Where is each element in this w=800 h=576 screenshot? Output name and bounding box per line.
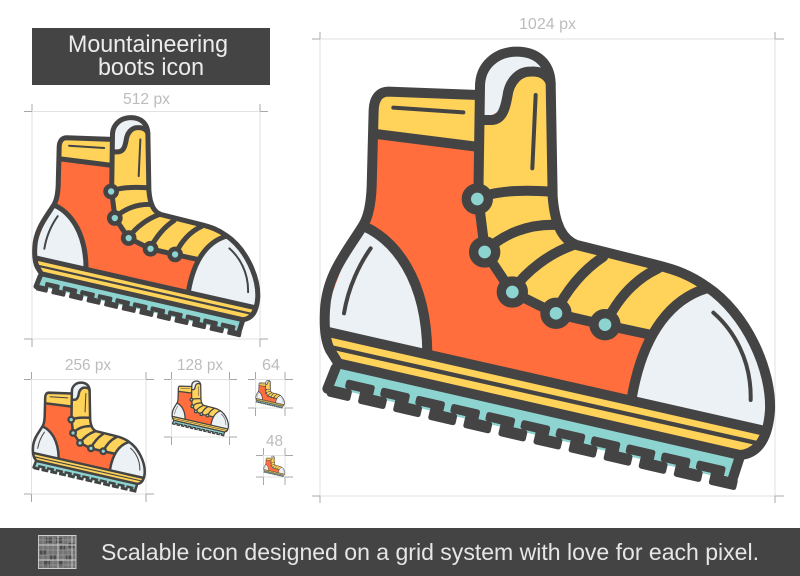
size guide: 512 px: 512 px [123,91,170,108]
icon: boot 512 px [35,118,258,336]
title [32,28,270,85]
footer caption: Scalable icon designed on a grid system with love for each pixel. [101,539,759,565]
boot silhouette [325,52,770,455]
size guide: 48 px [256,433,293,485]
highlights [344,95,751,400]
icon: boot 48 px [264,456,285,477]
icon: boot 1024 px [325,52,770,487]
eyelets [466,188,616,336]
tongue lining [480,52,551,122]
size guide: 128 px [164,357,237,445]
heel cap [325,227,427,353]
size guide: 128 px: 128 px [177,357,223,374]
icon: pixel grid [38,535,76,569]
size guide: 64 px [248,357,293,416]
size guide: 512 px [24,91,268,347]
icon: boot 256 px [33,383,145,492]
tongue and lace straps [478,72,707,335]
icon: boot 64 px [256,380,284,408]
sole stripes [327,332,767,455]
toe cap [632,288,769,430]
size guide: 1024 px: 1024 px [519,16,576,33]
size guide: 64 px: 64 [262,357,280,374]
size guide: 256 px: 256 px [65,357,111,374]
size guide: 256 px [24,357,154,502]
title: boots icon [98,54,204,81]
tread [326,363,741,487]
collar [375,93,478,147]
size guide: 48 px: 48 [266,433,283,450]
footer bar [0,528,800,576]
icon: boot 128 px [172,381,228,436]
title: Mountaineering [68,31,228,58]
boot outlines [325,52,770,455]
